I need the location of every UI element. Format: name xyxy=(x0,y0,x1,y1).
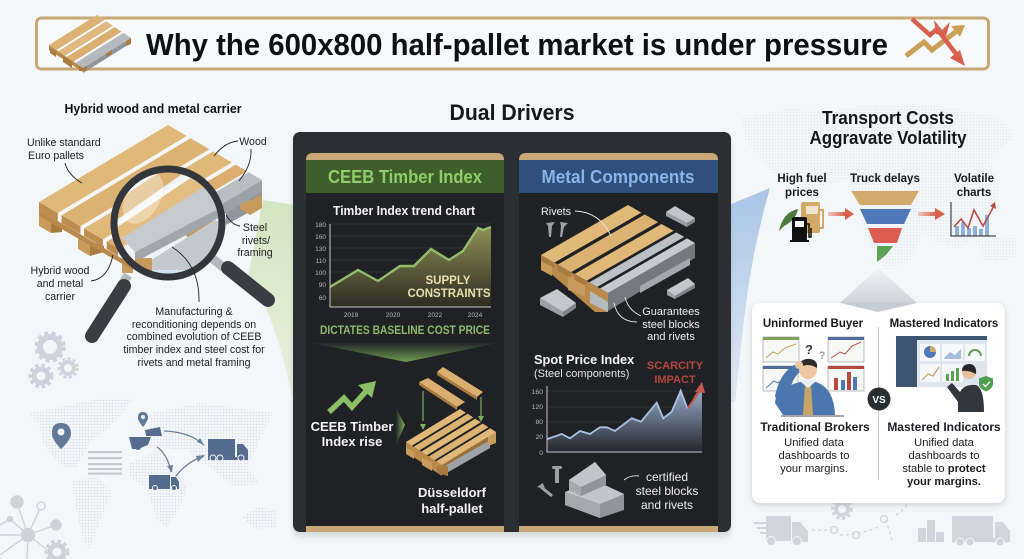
baseline caption: DICTATES BASELINE COST PRICE xyxy=(320,325,490,337)
heading: spot price index: (Steel components) xyxy=(534,368,629,380)
green connector wedge xyxy=(248,200,295,410)
heading: transport costs: Transport Costs xyxy=(822,108,954,128)
label: steel rivets framing: Steel xyxy=(243,222,267,234)
heading: spot price index: Spot Price Index xyxy=(534,352,635,367)
volatility arrows icon xyxy=(906,19,965,66)
bottom right logistics icons xyxy=(754,493,1010,546)
funnel xyxy=(851,191,919,262)
headline: Why the 600x800 half-pallet market is under pressure xyxy=(146,27,888,62)
icon: logistics routes and trucks xyxy=(52,412,248,490)
timber area chart: SUPPLY xyxy=(426,275,471,287)
timber area chart: 90 xyxy=(319,282,326,289)
label: manufacturing note: reconditioning depends on xyxy=(132,319,256,331)
icon: rivets xyxy=(546,222,568,237)
title pallet icon xyxy=(49,15,131,73)
timber area chart: 2022 xyxy=(428,312,443,319)
slat ends xyxy=(39,202,58,221)
label: certified steel blocks: steel blocks xyxy=(636,484,698,498)
label: unlike standard Euro pallets: Euro pallets xyxy=(28,150,84,162)
heading: transport costs xyxy=(810,108,966,148)
icon: steel blocks xyxy=(540,206,695,317)
label: guarantees steel blocks: and rivets xyxy=(647,331,695,343)
text: traditional brokers: Traditional Brokers xyxy=(760,420,870,434)
text: mastered indicators: dashboards to xyxy=(909,450,979,462)
label: manufacturing note: combined evolution of CEEB xyxy=(127,331,261,343)
heading: CEEB timber index: CEEB Timber Index xyxy=(328,166,483,187)
arrow: chevron xyxy=(396,408,405,445)
magnifier handles xyxy=(92,258,268,336)
label: certified steel blocks xyxy=(636,470,698,512)
label: hybrid wood and metal carrier: and metal xyxy=(37,278,83,290)
label: steel rivets framing: rivets/ xyxy=(242,235,270,247)
text: traditional brokers: Unified data xyxy=(784,437,845,449)
label: wood: Wood xyxy=(239,136,267,148)
text: traditional brokers xyxy=(760,420,870,475)
icon: rising arrow xyxy=(329,381,376,412)
timber area chart: 2020 xyxy=(386,312,401,319)
text: mastered indicators: stable to protect xyxy=(902,463,986,475)
label: manufacturing note xyxy=(123,306,265,369)
label: certified steel blocks: and rivets xyxy=(641,498,693,512)
background world map: upper right xyxy=(740,104,1018,270)
icon: confused buyer with charts: ? xyxy=(819,350,826,362)
hybrid pallet illustration xyxy=(39,125,268,336)
magnifier ring xyxy=(114,169,222,277)
leader: certified blocks xyxy=(624,476,639,480)
panel: metal components xyxy=(519,153,718,532)
timber area chart: 2019 xyxy=(344,312,359,319)
VS badge: VS xyxy=(872,395,886,406)
text: mastered indicators xyxy=(887,420,1001,488)
label: unlike standard Euro pallets xyxy=(27,137,101,162)
label: high fuel prices xyxy=(777,173,827,199)
text: mastered indicators: Unified data xyxy=(914,437,975,449)
label: steel rivets framing: framing xyxy=(237,247,273,259)
label: unlike standard Euro pallets: Unlike standard xyxy=(27,137,101,149)
label: Düsseldorf half-pallet xyxy=(418,485,487,516)
label: steel rivets framing xyxy=(237,222,273,259)
timber area chart: 60 xyxy=(319,295,326,302)
label: rivets: Rivets xyxy=(541,206,572,218)
timber area chart: 100 xyxy=(315,270,326,277)
label: scarcity impact: IMPACT xyxy=(654,374,696,386)
icon: analyst with dashboard xyxy=(896,336,993,412)
label: hybrid wood and metal carrier: Hybrid wood xyxy=(31,265,90,277)
panel: comparison card xyxy=(752,303,1005,505)
spot price area chart: 160 xyxy=(532,389,543,396)
hybrid pallet exploded illustration xyxy=(541,205,695,312)
label: manufacturing note: timber index and steel cost for xyxy=(123,344,265,356)
label: CEEB timber index rise: Index rise xyxy=(322,434,382,449)
label: volatile charts: charts xyxy=(957,187,991,199)
label: high fuel prices: High fuel xyxy=(777,173,827,185)
metal strip xyxy=(120,172,262,257)
label: guarantees steel blocks: Guarantees xyxy=(642,306,700,318)
icon: fuel pumps xyxy=(779,202,823,242)
timber area chart: 180 xyxy=(315,222,326,229)
leader: steel blocks xyxy=(614,297,641,322)
label: Düsseldorf half-pallet: Düsseldorf xyxy=(418,485,487,500)
label: hybrid wood and metal carrier: carrier xyxy=(45,291,75,303)
heading: uninformed buyer: Uninformed Buyer xyxy=(763,318,864,330)
spot price area chart: 0 xyxy=(539,450,543,457)
label: manufacturing note: rivets and metal framing xyxy=(137,357,251,369)
title banner xyxy=(36,15,988,73)
label: Düsseldorf half-pallet: half-pallet xyxy=(421,501,483,516)
lens view xyxy=(118,172,218,274)
icon: network nodes xyxy=(0,496,68,559)
timber area chart: CONSTRAINTS xyxy=(407,288,491,300)
heading: spot price index xyxy=(534,352,635,380)
label: volatile charts xyxy=(954,173,994,199)
panel: CEEB timber index xyxy=(306,153,504,532)
label: hybrid wood and metal carrier xyxy=(31,265,90,303)
arrow: cone to comparison card xyxy=(840,268,917,312)
text block lines xyxy=(88,451,122,475)
background world map: lower left xyxy=(27,398,277,550)
text: traditional brokers: dashboards to xyxy=(779,450,849,462)
label: guarantees steel blocks xyxy=(642,306,700,343)
wood slats xyxy=(39,125,187,213)
heading: metal components: Metal Components xyxy=(542,166,694,187)
heading: transport costs: Aggravate Volatility xyxy=(810,128,966,148)
heading: hybrid carrier: Hybrid wood and metal carrier xyxy=(64,102,242,116)
timber area chart: 160 xyxy=(315,234,326,241)
panel: dual drivers xyxy=(293,132,731,537)
spot price area chart: 20 xyxy=(535,434,543,441)
icon: volatile chart xyxy=(951,202,996,236)
heading: mastered indicators: Mastered Indicators xyxy=(890,318,998,330)
spot price area chart: 120 xyxy=(532,404,543,411)
label: guarantees steel blocks: steel blocks xyxy=(642,319,700,331)
VS badge xyxy=(868,388,890,410)
label: high fuel prices: prices xyxy=(785,187,819,199)
icon: gears xyxy=(30,333,78,387)
icon: confused buyer with charts xyxy=(763,337,864,416)
timber area chart: 2024 xyxy=(468,312,483,319)
arrow: fuel to funnel xyxy=(828,208,854,220)
leader: rivets xyxy=(575,211,611,236)
label: truck delays: Truck delays xyxy=(850,173,920,185)
blue connector wedge xyxy=(729,188,770,402)
text: mastered indicators: Mastered Indicators xyxy=(887,420,1001,434)
heading: dual drivers: Dual Drivers xyxy=(450,100,574,125)
spot price area chart: 80 xyxy=(535,419,543,426)
icon: certified steel blocks xyxy=(537,462,624,518)
leader lines: pallet labels xyxy=(65,141,251,302)
label: CEEB timber index rise xyxy=(311,419,393,449)
label: volatile charts: Volatile xyxy=(954,173,994,185)
label: CEEB timber index rise: CEEB Timber xyxy=(311,419,393,434)
label: scarcity impact: SCARCITY xyxy=(647,360,704,372)
timber area chart xyxy=(315,222,491,319)
lower blocks and frame xyxy=(39,180,262,273)
timber area chart: 110 xyxy=(316,258,326,265)
label: certified steel blocks: certified xyxy=(646,470,688,484)
arrow: funnel to charts xyxy=(918,208,945,220)
timber area chart: 130 xyxy=(315,246,326,253)
exploded half pallet xyxy=(406,367,496,476)
text: traditional brokers: your margins. xyxy=(780,463,848,475)
label: scarcity impact xyxy=(647,360,704,386)
icon: confused buyer with charts: ? xyxy=(805,342,813,357)
chart title: Timber Index trend chart xyxy=(333,203,476,218)
text: mastered indicators: your margins. xyxy=(907,476,981,488)
spot price area chart xyxy=(532,382,705,457)
arrow: downward wedge xyxy=(312,343,498,362)
label: manufacturing note: Manufacturing & xyxy=(155,306,233,318)
